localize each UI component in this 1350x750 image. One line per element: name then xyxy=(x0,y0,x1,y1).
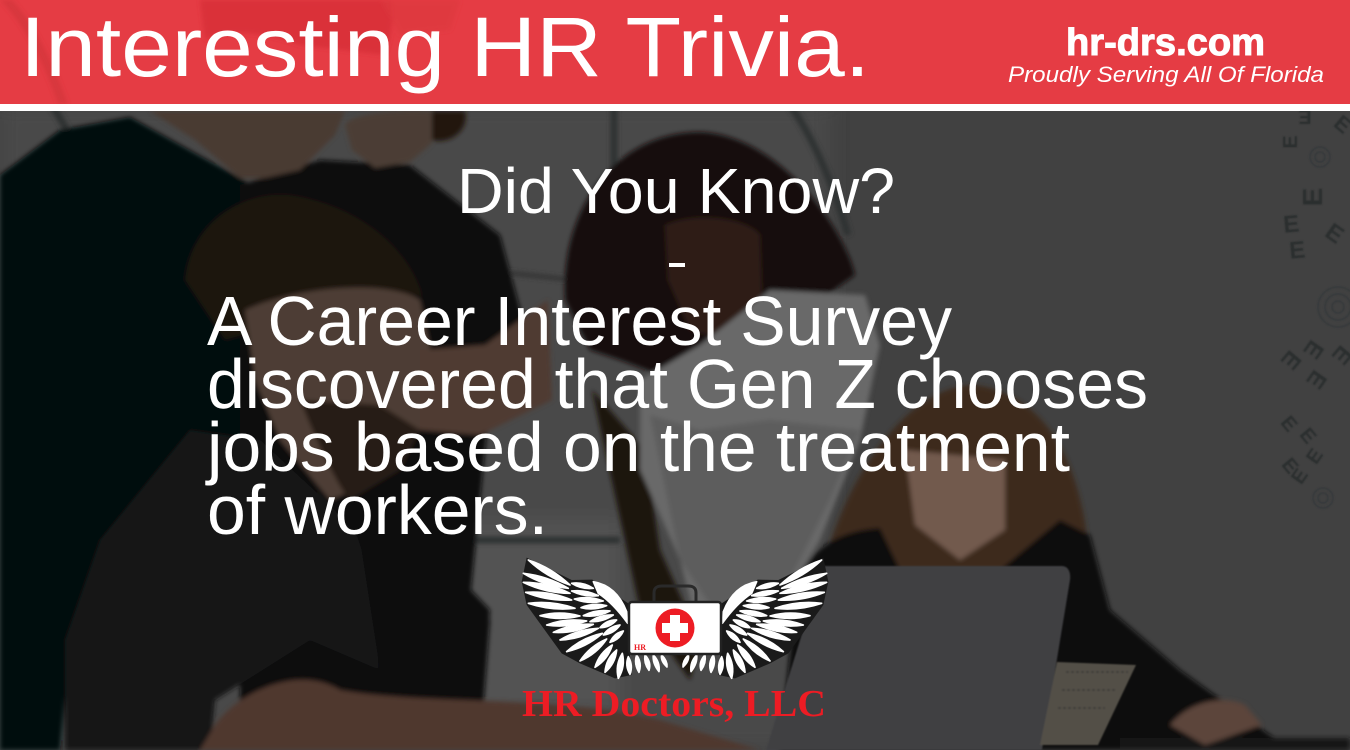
heading: Did You Know? xyxy=(457,155,895,227)
foreground arm xyxy=(200,680,760,750)
man left torso xyxy=(0,117,345,750)
forearm over seated man xyxy=(420,300,552,435)
logo wordmark: HR Doctors, LLC xyxy=(522,683,826,725)
man back shirt xyxy=(240,160,530,750)
body statement xyxy=(205,282,1148,549)
eye chart wall art: E xyxy=(1302,445,1328,468)
seated woman face xyxy=(905,450,1005,560)
woman standing: arm xyxy=(592,390,700,680)
main text: did you know xyxy=(205,155,1148,549)
seated man shirt xyxy=(65,430,380,750)
body statement: discovered that Gen Z chooses xyxy=(207,345,1148,423)
seated man face xyxy=(245,288,435,500)
laptop lid xyxy=(766,566,1070,750)
header title: Interesting HR Trivia. xyxy=(20,0,870,94)
eye chart wall art: E xyxy=(1320,218,1349,250)
notebook xyxy=(1040,662,1136,745)
eye chart wall art xyxy=(1275,105,1350,508)
woman standing: cardigan and top xyxy=(640,290,880,640)
woman hand xyxy=(1170,700,1262,745)
seated woman blazer xyxy=(780,520,1290,750)
man left neck and chin xyxy=(150,111,345,178)
eye chart wall art: E xyxy=(1287,465,1313,488)
bottom table xyxy=(1120,738,1350,750)
eye chart wall art: E xyxy=(1276,412,1301,436)
eye chart wall art: E xyxy=(1298,105,1312,127)
icon: left wing xyxy=(522,558,667,678)
eye chart wall art: E xyxy=(1275,345,1306,375)
eye chart wall art: E xyxy=(1282,210,1301,239)
icon: medical case: HR xyxy=(634,643,646,652)
eye chart wall art: E xyxy=(1297,188,1328,206)
window frames xyxy=(52,105,848,540)
icon: right wing xyxy=(683,558,828,678)
eye chart wall art: E xyxy=(1297,335,1329,364)
eye chart wall art: E xyxy=(1280,135,1302,149)
eye chart wall art: E xyxy=(1300,365,1332,394)
woman standing: hair xyxy=(565,132,855,390)
logo: HR Doctors winged medical case xyxy=(522,558,828,725)
eye chart wall art: E xyxy=(1277,454,1302,478)
separator dash xyxy=(669,263,685,267)
man back hair and face xyxy=(345,111,448,168)
icon: medical case xyxy=(629,586,721,654)
tagline: Proudly Serving All Of Florida xyxy=(1008,62,1324,87)
seated woman hair xyxy=(825,385,1100,650)
body statement: A Career Interest Survey xyxy=(207,282,952,360)
eye chart wall art: E xyxy=(1295,424,1320,448)
header banner xyxy=(0,0,1350,111)
body statement: jobs based on the treatment xyxy=(205,408,1070,486)
woman standing: face xyxy=(665,218,762,340)
website: hr-drs.com xyxy=(1066,22,1265,64)
body statement: of workers. xyxy=(207,471,548,549)
eye chart wall art: E xyxy=(1288,236,1307,265)
seated man hair xyxy=(185,195,422,340)
